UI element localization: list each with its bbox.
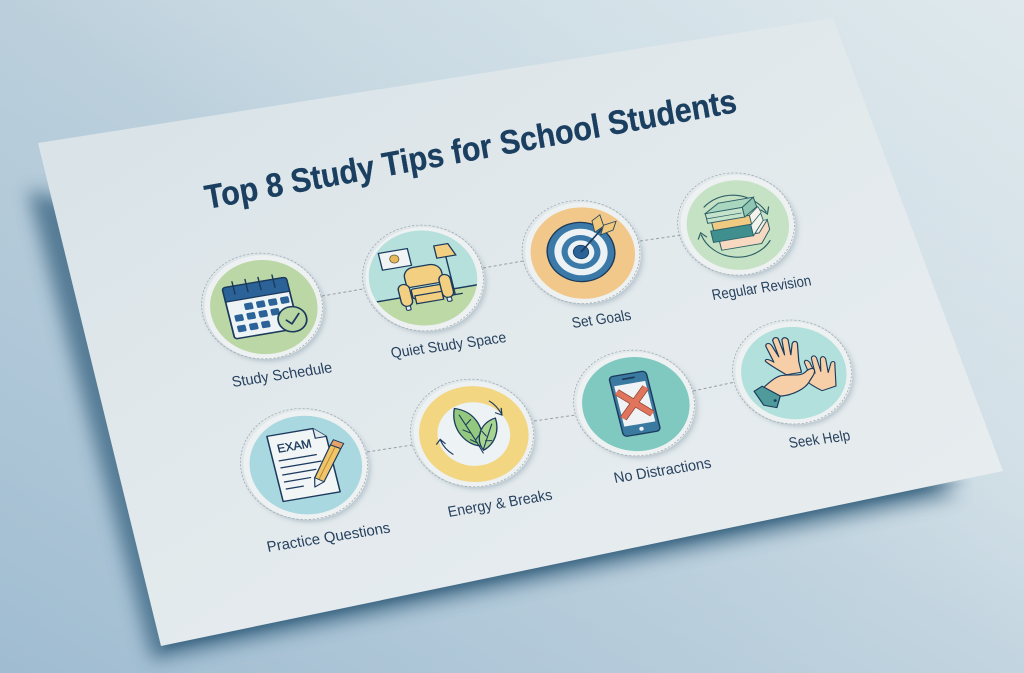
label: Energy & Breaks: Energy & Breaks <box>446 487 554 521</box>
connector: distractions to help <box>693 382 735 391</box>
connector: practice to energy <box>367 445 412 452</box>
icon: energy and breaks leaf <box>399 370 546 496</box>
label: Set Goals: Set Goals <box>570 307 633 332</box>
label: Quiet Study Space: Quiet Study Space <box>389 330 508 362</box>
icon: seek help hands <box>721 311 863 433</box>
label: Study Schedule: Study Schedule <box>230 360 334 391</box>
icon: practice questions exam paper <box>228 399 380 530</box>
icon: regular revision books <box>666 164 806 284</box>
label: Seek Help: Seek Help <box>787 428 852 452</box>
label: No Distractions: No Distractions <box>612 455 713 487</box>
icon: set goals target <box>511 192 652 313</box>
label: Practice Questions: Practice Questions <box>265 520 392 556</box>
label: Regular Revision: Regular Revision <box>710 273 813 304</box>
connector: goals to revision <box>640 235 682 241</box>
connector: quiet space to goals <box>483 261 523 268</box>
title: Top 8 Study Tips for School Students <box>202 83 739 217</box>
icon: no distractions phone <box>562 341 707 465</box>
icon: study schedule calendar <box>190 244 335 368</box>
connector: energy to distractions <box>534 415 576 421</box>
icon: practice questions exam paper: EXAM <box>276 437 313 456</box>
connector: schedule to quiet space <box>322 289 363 296</box>
paper shadow <box>28 190 970 660</box>
icon: quiet study space <box>362 224 489 336</box>
